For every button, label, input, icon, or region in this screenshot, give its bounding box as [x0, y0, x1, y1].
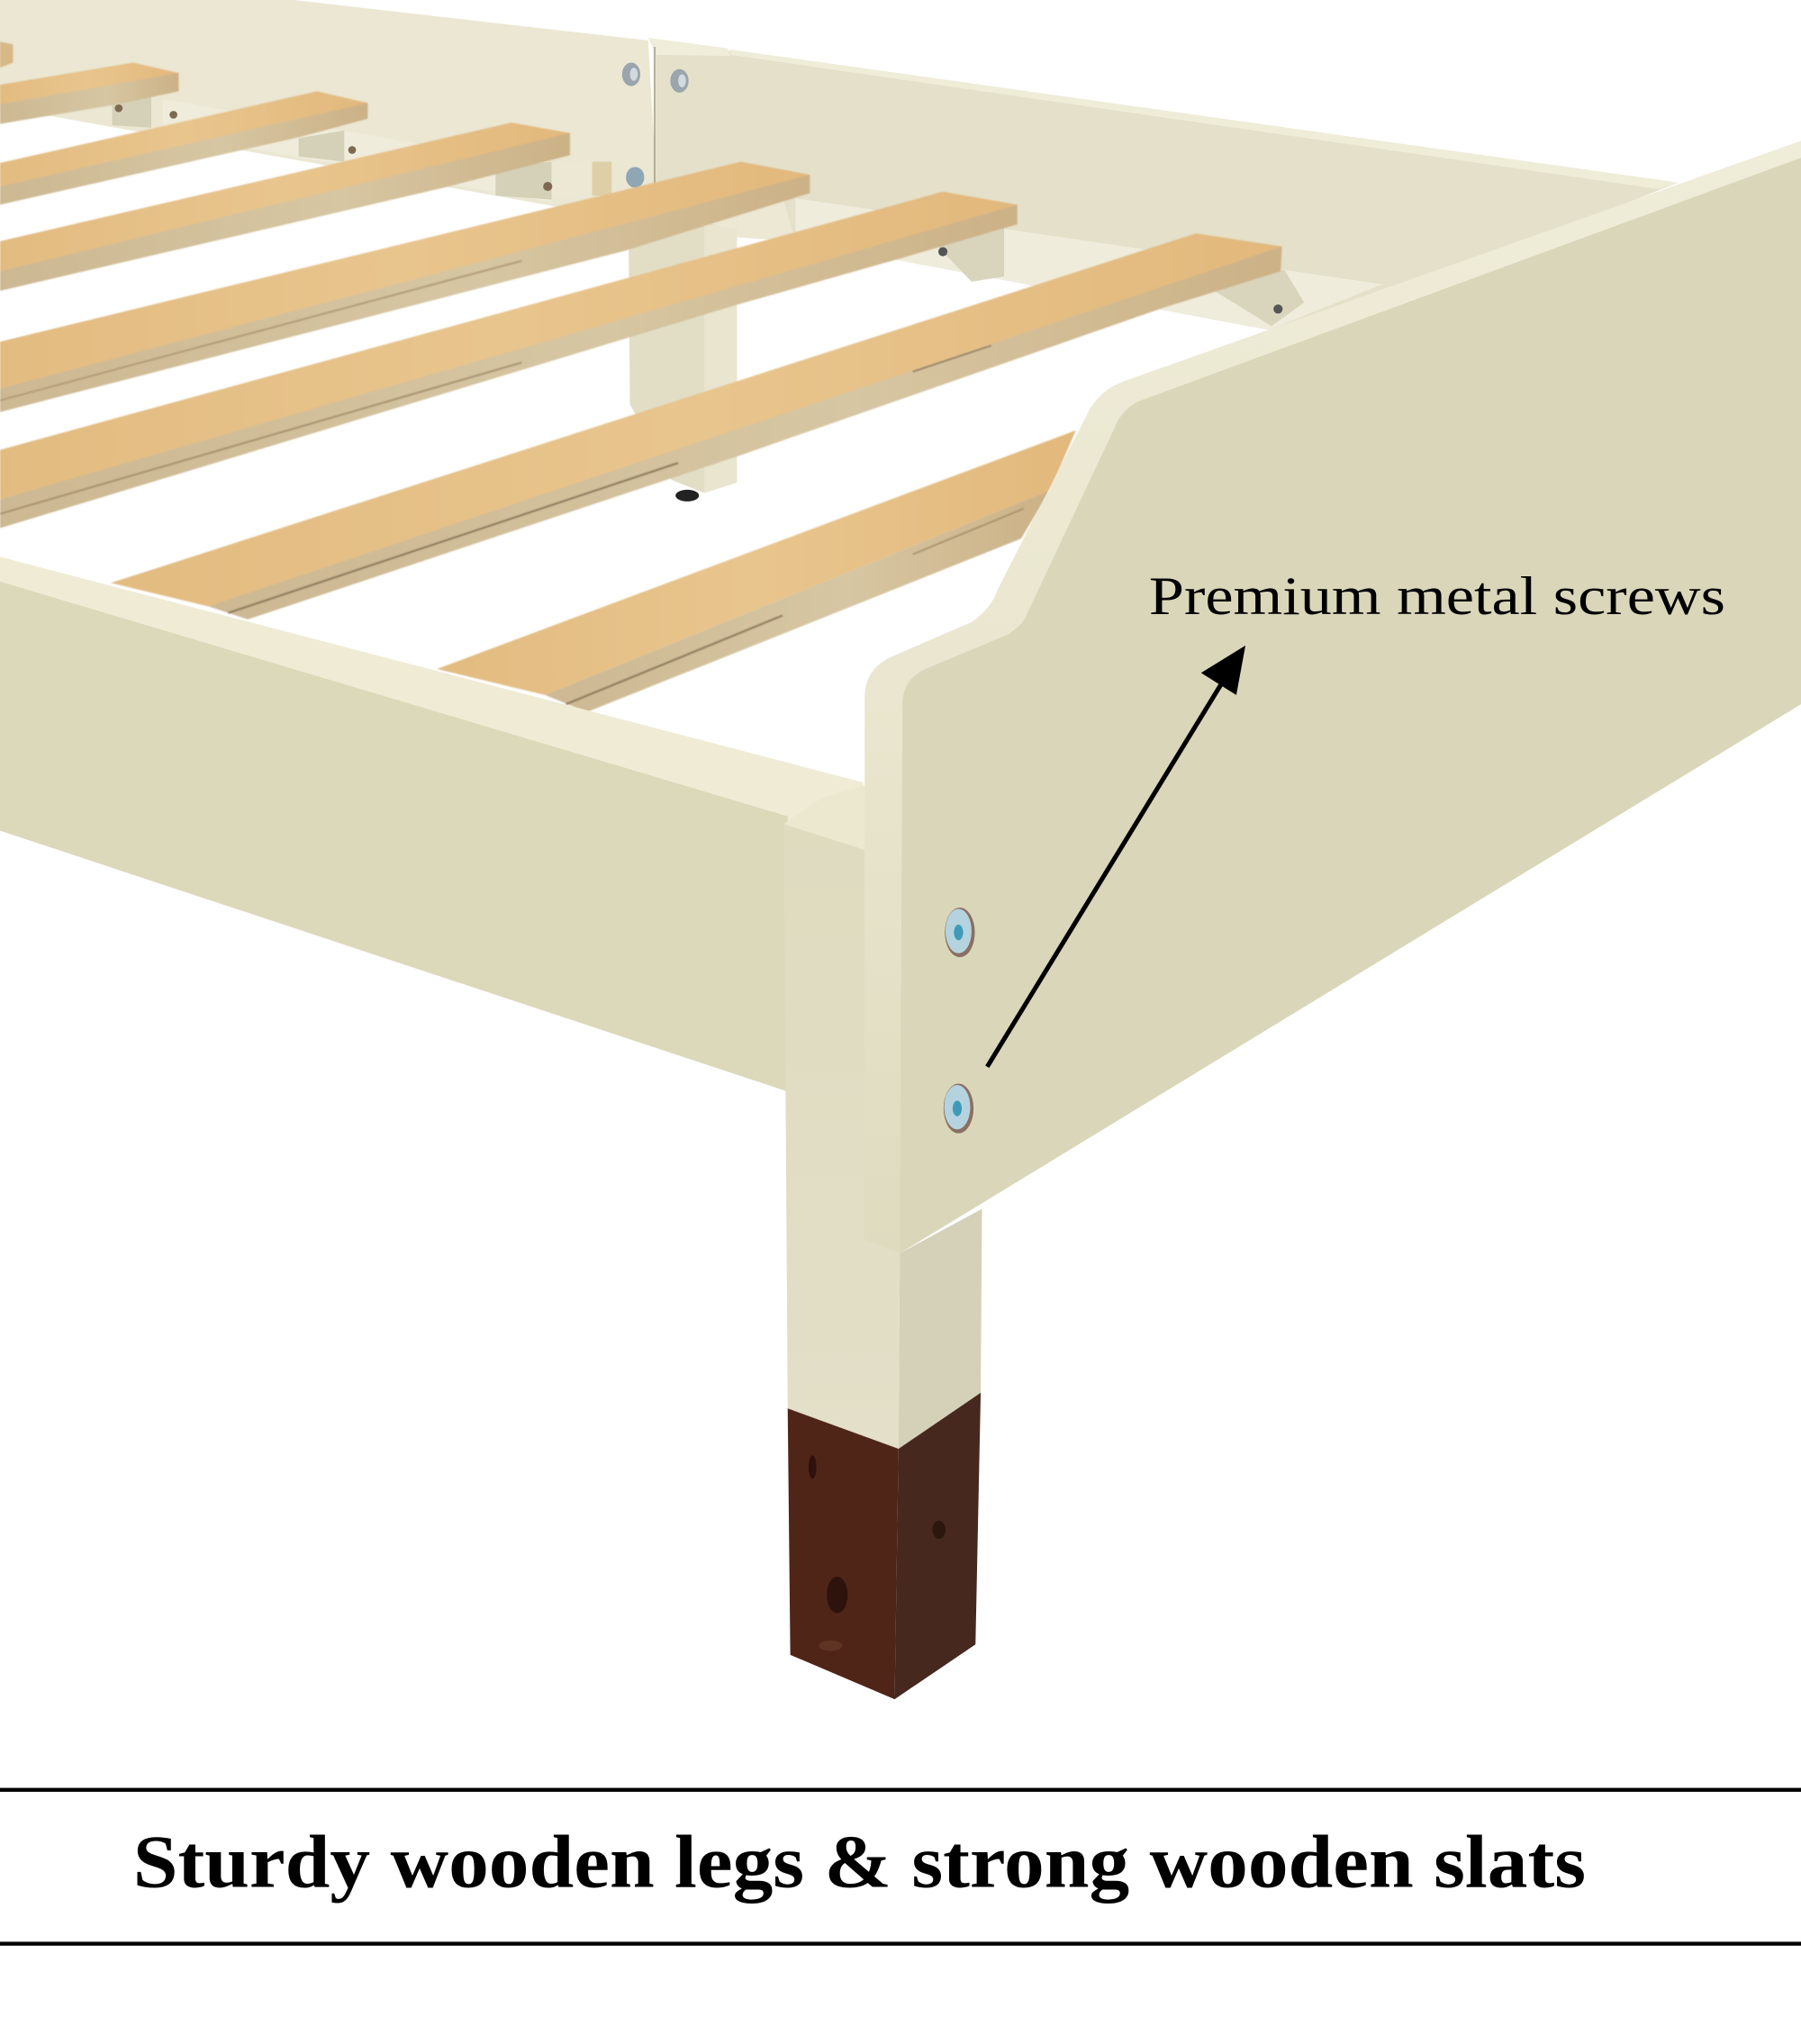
- icon: metal screw bottom: [944, 1084, 973, 1134]
- slat 3: [0, 122, 570, 291]
- slat 4: [0, 162, 810, 412]
- wooden slats: [0, 41, 1282, 712]
- slat 2: [0, 91, 367, 204]
- leg right face: [899, 1209, 982, 1449]
- callout label: Premium metal screws: [1149, 566, 1725, 627]
- centre support leg: [629, 224, 737, 502]
- wooden corner leg: [783, 785, 982, 1699]
- leg front face: [783, 824, 900, 1449]
- headboard panel: [864, 140, 1801, 1253]
- front side rail: [0, 556, 864, 1091]
- slat 0: [0, 41, 13, 68]
- screws on back rail: [114, 63, 1282, 313]
- slat 1: [0, 63, 178, 124]
- icon: metal screw top: [945, 908, 975, 957]
- caption heading: Sturdy wooden legs & strong wooden slats: [133, 1821, 1586, 1904]
- dark foot: [788, 1393, 981, 1699]
- back rail: [0, 0, 1679, 330]
- caption band: [0, 1788, 1801, 1946]
- slat 7: [437, 430, 1076, 712]
- slat 5: [0, 192, 1018, 529]
- slat 6: [111, 233, 1282, 620]
- post top: [783, 785, 866, 852]
- ledger strips and brackets: [113, 96, 1382, 330]
- arrow to screws: [987, 646, 1245, 1067]
